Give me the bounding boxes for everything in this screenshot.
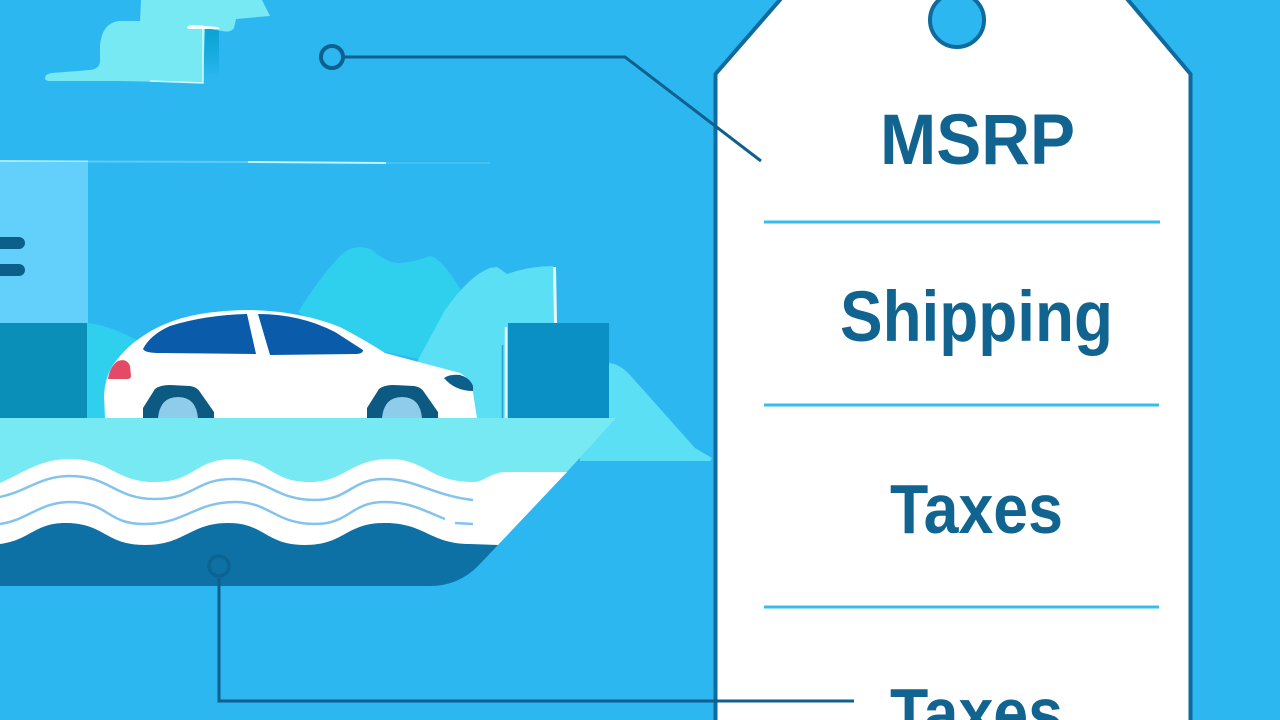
dock block (0, 323, 87, 418)
row: MSRP: MSRP (880, 101, 1075, 180)
connector: cloud to tag (321, 46, 761, 161)
building (0, 162, 88, 323)
icon: cloud (45, 0, 270, 83)
row: Taxes: Taxes (890, 470, 1063, 548)
front side window (258, 314, 363, 355)
price tag (716, 0, 1190, 720)
lower wave dash (455, 523, 473, 524)
dark lower hull (0, 523, 498, 586)
lower wave line (0, 502, 445, 524)
deck (0, 418, 616, 490)
tag hole (930, 0, 984, 47)
row: Shipping: Shipping (840, 278, 1113, 357)
rear side window (143, 314, 256, 354)
mountains (87, 247, 712, 461)
horizon deck line (0, 161, 490, 163)
container box (502, 323, 609, 418)
connector: hull to tag (209, 556, 854, 701)
car (104, 310, 477, 418)
headlight (444, 375, 473, 391)
white wave band (0, 459, 567, 546)
ship hull (0, 418, 616, 586)
tail light (108, 360, 131, 379)
front wheel (367, 385, 438, 418)
upper wave line (0, 476, 473, 500)
building window slats (0, 237, 25, 276)
rear wheel (143, 385, 214, 418)
